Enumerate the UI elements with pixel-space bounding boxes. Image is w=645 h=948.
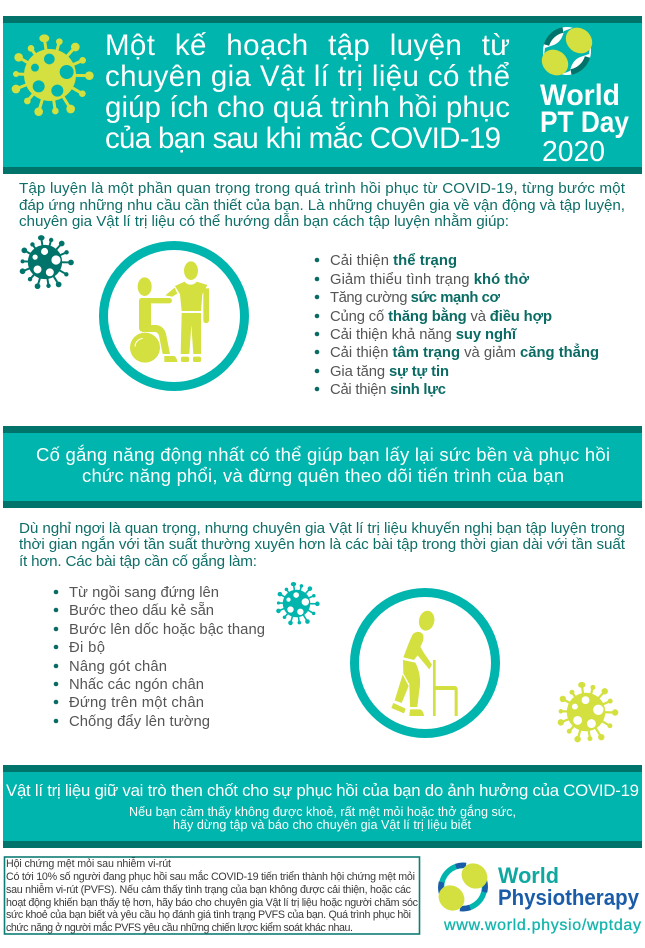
list: exercises to try	[54, 585, 265, 730]
panel: header banner	[3, 16, 642, 174]
text block: exercise advice paragraph: Dù nghỉ ngơi là quan trọng, nhưng chuyên gia Vật lí trị liệu khuyến nghị bạn tập luyện trong	[19, 520, 625, 537]
list: exercises to try: Nhấc các ngón chân	[69, 677, 204, 693]
list: exercises to try: Bước theo dấu kẻ sẵn	[69, 602, 214, 619]
list: exercises to try: Chống đẩy lên tường	[69, 714, 210, 730]
text block: exercise advice paragraph: thời gian ngắn với tần suất thường xuyên hơn là các bài tập trong thời gian dài với tần suất	[19, 536, 626, 553]
list: exercises to try: Nâng gót chân	[69, 659, 167, 675]
list: benefits of exercise	[315, 253, 599, 398]
title	[105, 29, 510, 155]
icon: teal virus	[276, 582, 320, 625]
panel: post-viral fatigue syndrome box	[4, 857, 420, 934]
text block: intro paragraph: chuyên gia Vật lí trị liệu có thể hướng dẫn bạn cách tập luyện nhằm giúp:	[19, 213, 509, 230]
logo: World Physiotherapy: www.world.physio/wptday	[443, 917, 641, 934]
list: benefits of exercise: Giảm thiểu tình trạng khó thở	[330, 272, 529, 288]
panel: key role banner: Vật lí trị liệu giữ vai trò then chốt cho sự phục hồi của bạn do ảnh hưởng của COVID-19	[6, 781, 639, 800]
panel: post-viral fatigue syndrome box: Hội chứng mệt mỏi sau nhiễm vi-rút	[6, 857, 171, 870]
icon: physiotherapist with patient in circle	[104, 246, 244, 386]
list: exercises to try: Đứng trên một chân	[69, 695, 204, 711]
icon: dark teal virus	[20, 235, 74, 289]
logo: World Physiotherapy	[433, 858, 641, 934]
panel: key role banner: Nếu bạn cảm thấy không được khoẻ, rất mệt mỏi hoặc thở gắng sức,	[129, 804, 516, 819]
list: exercises to try: Đi bộ	[69, 640, 105, 656]
panel: post-viral fatigue syndrome box: sau nhiễm vi-rút (PVFS). Nếu cảm thấy tình trạng của bạn không được cải thiện, hoặc các	[6, 883, 412, 896]
icon: older person with walker in circle	[354, 592, 496, 734]
panel: post-viral fatigue syndrome box: chức năng ở người mắc PVFS yêu cầu những chiến lược kiểm soát khác nhau.	[6, 921, 353, 934]
logo: World PT Day 2020	[537, 22, 629, 168]
panel: post-viral fatigue syndrome box: sức khoẻ của bạn biết và yêu cầu họ đánh giá tình trạng PVFS của bạn. Quá trình phục hồi	[6, 909, 411, 921]
text block: exercise advice paragraph: ít hơn. Các bài tập cần cố gắng làm:	[19, 553, 257, 570]
list: benefits of exercise: Cải thiện sinh lực	[330, 382, 446, 398]
logo: World PT Day 2020: World	[540, 79, 620, 112]
list: benefits of exercise: Tăng cường sức mạnh cơ	[330, 290, 500, 306]
panel: key role banner	[3, 765, 642, 848]
panel: stay active banner: Cố gắng năng động nhất có thể giúp bạn lấy lại sức bền và phục hồi	[36, 444, 610, 465]
list: exercises to try: Từ ngồi sang đứng lên	[69, 585, 219, 601]
list: exercises to try: Bước lên dốc hoặc bậc thang	[69, 622, 265, 638]
title: của bạn sau khi mắc COVID-19	[105, 122, 501, 155]
text block: intro paragraph: Tập luyện là một phần quan trọng trong quá trình hồi phục từ COVID-19, từng bước một	[19, 180, 626, 197]
text block: intro paragraph	[19, 180, 626, 230]
icon: lime virus in header	[12, 34, 94, 116]
list: benefits of exercise: Gia tăng sự tự tin	[330, 364, 449, 380]
list: benefits of exercise: Cải thiện tâm trạng và giảm căng thẳng	[330, 343, 599, 361]
logo: World PT Day 2020: PT Day	[540, 106, 629, 139]
list: benefits of exercise: Cải thiện thể trạng	[330, 253, 457, 269]
title: Một kế hoạch tập luyện từ	[105, 29, 510, 62]
panel: post-viral fatigue syndrome box: Có tới 10% số người đang phục hồi sau mắc COVID-19 tiến triển thành hội chứng mệt mỏi	[6, 870, 415, 883]
icon: lime virus	[558, 682, 618, 742]
text block: intro paragraph: đáp ứng những nhu cầu cần thiết của bạn. Là những chuyên gia về vận động và tập luyện,	[19, 197, 625, 214]
panel: stay active banner: chức năng phổi, và đừng quên theo dõi tiến trình của bạn	[82, 465, 564, 486]
logo: World Physiotherapy: World	[498, 863, 559, 888]
panel: stay active banner	[3, 426, 642, 508]
panel: post-viral fatigue syndrome box: hoạt động khiến bạn thấy tệ hơn, hãy báo cho chuyên gia Vật lí trị liệu hoặc người chăm sóc	[6, 897, 419, 909]
text block: exercise advice paragraph	[19, 520, 626, 570]
title: giúp ích cho quá trình hồi phục	[105, 91, 510, 124]
list: benefits of exercise: Củng cố thăng bằng và điều hợp	[330, 307, 552, 325]
title: chuyên gia Vật lí trị liệu có thể	[105, 60, 510, 93]
logo: World PT Day 2020: 2020	[542, 136, 605, 168]
panel: key role banner: hãy dừng tập và báo cho chuyên gia Vật lí trị liệu biết	[173, 818, 472, 832]
list: benefits of exercise: Cải thiện khả năng suy nghĩ	[330, 327, 517, 343]
